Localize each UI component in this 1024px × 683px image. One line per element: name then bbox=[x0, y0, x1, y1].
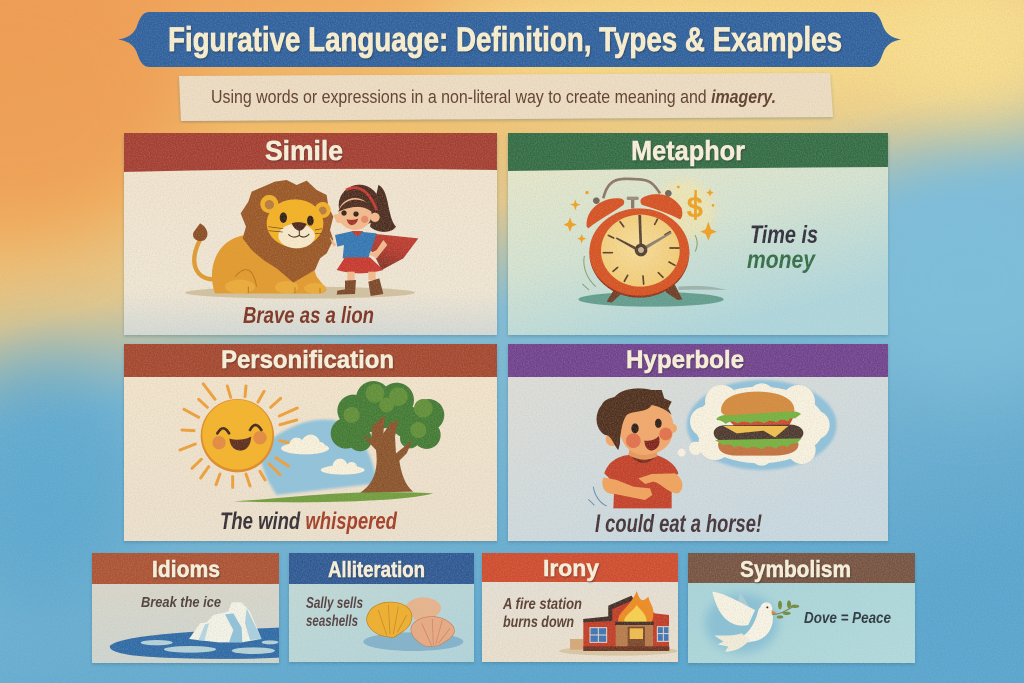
icon: alarm clock with dollar sign: $ bbox=[687, 191, 703, 224]
alliteration header bbox=[289, 553, 474, 584]
hyperbole header: Hyperbole bbox=[626, 346, 744, 374]
irony caption bbox=[502, 596, 582, 631]
metaphor caption: Time is bbox=[750, 221, 818, 249]
icon: boy dreaming of a burger bbox=[588, 380, 837, 508]
panel: symbolism bbox=[688, 553, 915, 663]
icon: lion and superhero girl bbox=[185, 180, 418, 299]
irony caption: burns down bbox=[503, 614, 574, 631]
icon: dove with olive branch bbox=[705, 592, 799, 653]
panel: personification bbox=[124, 344, 497, 541]
hyperbole header bbox=[508, 344, 888, 377]
personification caption: The wind whispered bbox=[220, 508, 398, 535]
idioms header: Idioms bbox=[152, 556, 220, 582]
alliteration caption bbox=[306, 595, 363, 630]
title text: Figurative Language: Definition, Types & Examples bbox=[168, 21, 842, 59]
metaphor header bbox=[508, 133, 888, 171]
simile header: Simile bbox=[265, 135, 343, 166]
icon: burning fire station bbox=[559, 591, 678, 656]
irony header bbox=[482, 553, 678, 582]
alliteration caption: Sally sells bbox=[306, 595, 363, 612]
idioms caption: Break the ice bbox=[141, 594, 221, 611]
panel: irony bbox=[482, 553, 678, 662]
panel: idioms bbox=[92, 553, 279, 663]
simile caption: Brave as a lion bbox=[243, 302, 374, 328]
title banner bbox=[118, 12, 901, 67]
panel: hyperbole bbox=[508, 344, 888, 541]
icon: alarm clock with dollar sign bbox=[564, 179, 727, 307]
icon: iceberg in water bbox=[110, 602, 279, 659]
irony caption: A fire station bbox=[502, 596, 582, 613]
panel: simile bbox=[124, 133, 497, 335]
panel: metaphor bbox=[508, 133, 888, 335]
definition text: Using words or expressions in a non-literal way to create meaning and imagery. bbox=[211, 87, 776, 107]
metaphor caption: money bbox=[747, 246, 816, 274]
personification header: Personification bbox=[221, 346, 394, 374]
symbolism header: Symbolism bbox=[740, 556, 851, 582]
icon: seashells bbox=[363, 597, 463, 651]
icon: smiling sun, sky and tree bbox=[180, 381, 444, 502]
personification header bbox=[124, 344, 497, 377]
metaphor header: Metaphor bbox=[631, 135, 745, 166]
hyperbole caption: I could eat a horse! bbox=[595, 510, 762, 538]
simile header bbox=[124, 133, 497, 172]
irony header: Irony bbox=[543, 555, 599, 581]
alliteration header: Alliteration bbox=[328, 557, 425, 582]
alliteration caption: seashells bbox=[306, 613, 358, 630]
idioms header bbox=[92, 553, 279, 584]
definition strip bbox=[179, 73, 833, 121]
metaphor caption bbox=[747, 221, 818, 274]
panel: alliteration bbox=[289, 553, 474, 662]
symbolism header bbox=[688, 553, 915, 583]
symbolism caption: Dove = Peace bbox=[804, 610, 891, 627]
